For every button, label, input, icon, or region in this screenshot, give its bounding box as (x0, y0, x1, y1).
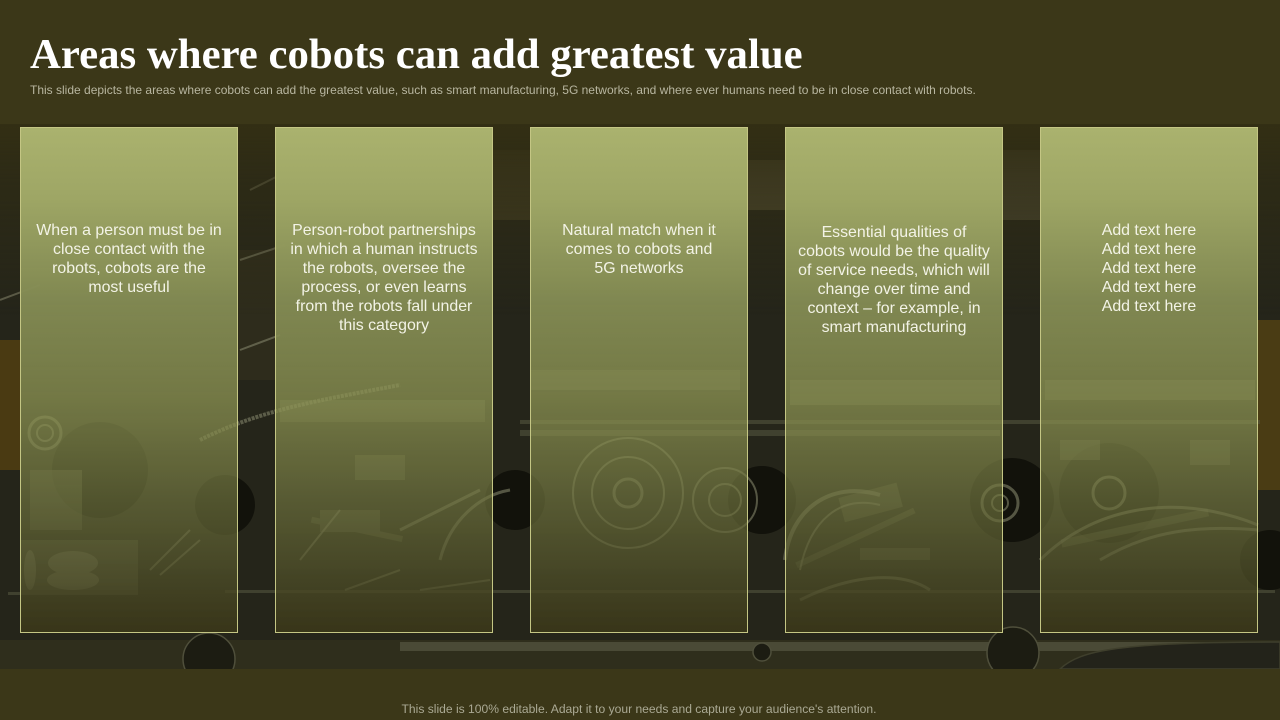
text: close contact (36, 222, 222, 296)
text: placeholder: Add text here (1102, 298, 1196, 315)
text: partnerships: process, or even learns (301, 279, 467, 296)
text: placeholder: Add text here (1102, 279, 1196, 296)
text: quality of service: context – for example, in (807, 300, 981, 317)
text: quality of service: change over time and (818, 281, 970, 298)
text: 5G networks: Natural match when it (562, 222, 716, 239)
footer note: This slide is 100% editable. Adapt it to your needs and capture your audience's attention. (402, 702, 876, 716)
text: partnerships: from the robots fall under (296, 298, 472, 315)
text: 5G networks: 5G networks (594, 260, 684, 277)
panel: placeholder (1040, 127, 1258, 633)
text: 5G networks (562, 222, 716, 277)
title: Areas where cobots can add greatest value (30, 31, 803, 78)
panel: close contact (20, 127, 238, 633)
text: quality of service: smart manufacturing (822, 319, 966, 336)
text: quality of service (798, 224, 990, 336)
text: partnerships: Person-robot partnerships (292, 222, 476, 239)
text: quality of service: cobots would be the quality (798, 243, 990, 260)
text: placeholder: Add text here (1102, 241, 1196, 258)
text: placeholder: Add text here (1102, 222, 1196, 239)
panel: partnerships (275, 127, 493, 633)
text: placeholder: Add text here (1102, 260, 1196, 277)
text: quality of service: of service needs, which will (798, 262, 990, 279)
panel: quality of service (785, 127, 1003, 633)
text: quality of service: Essential qualities of (822, 224, 966, 241)
background photo: engine machinery (0, 124, 1280, 669)
text: partnerships: this category (339, 317, 429, 334)
text: close contact: most useful (88, 279, 170, 296)
subtitle: This slide depicts the areas where cobots can add the greatest value, such as smart manufacturing, 5G networks, and where ever humans need to be in close contact with robots. (30, 83, 976, 97)
text: partnerships: the robots, oversee the (303, 260, 465, 277)
text: partnerships: in which a human instructs (290, 241, 478, 258)
text: close contact: When a person must be in (36, 222, 222, 239)
panel: 5G networks (530, 127, 748, 633)
text: placeholder (1102, 222, 1196, 315)
text: partnerships (290, 222, 478, 334)
text: close contact: close contact with the (53, 241, 205, 258)
text: close contact: robots, cobots are the (52, 260, 206, 277)
text: 5G networks: comes to cobots and (566, 241, 712, 258)
